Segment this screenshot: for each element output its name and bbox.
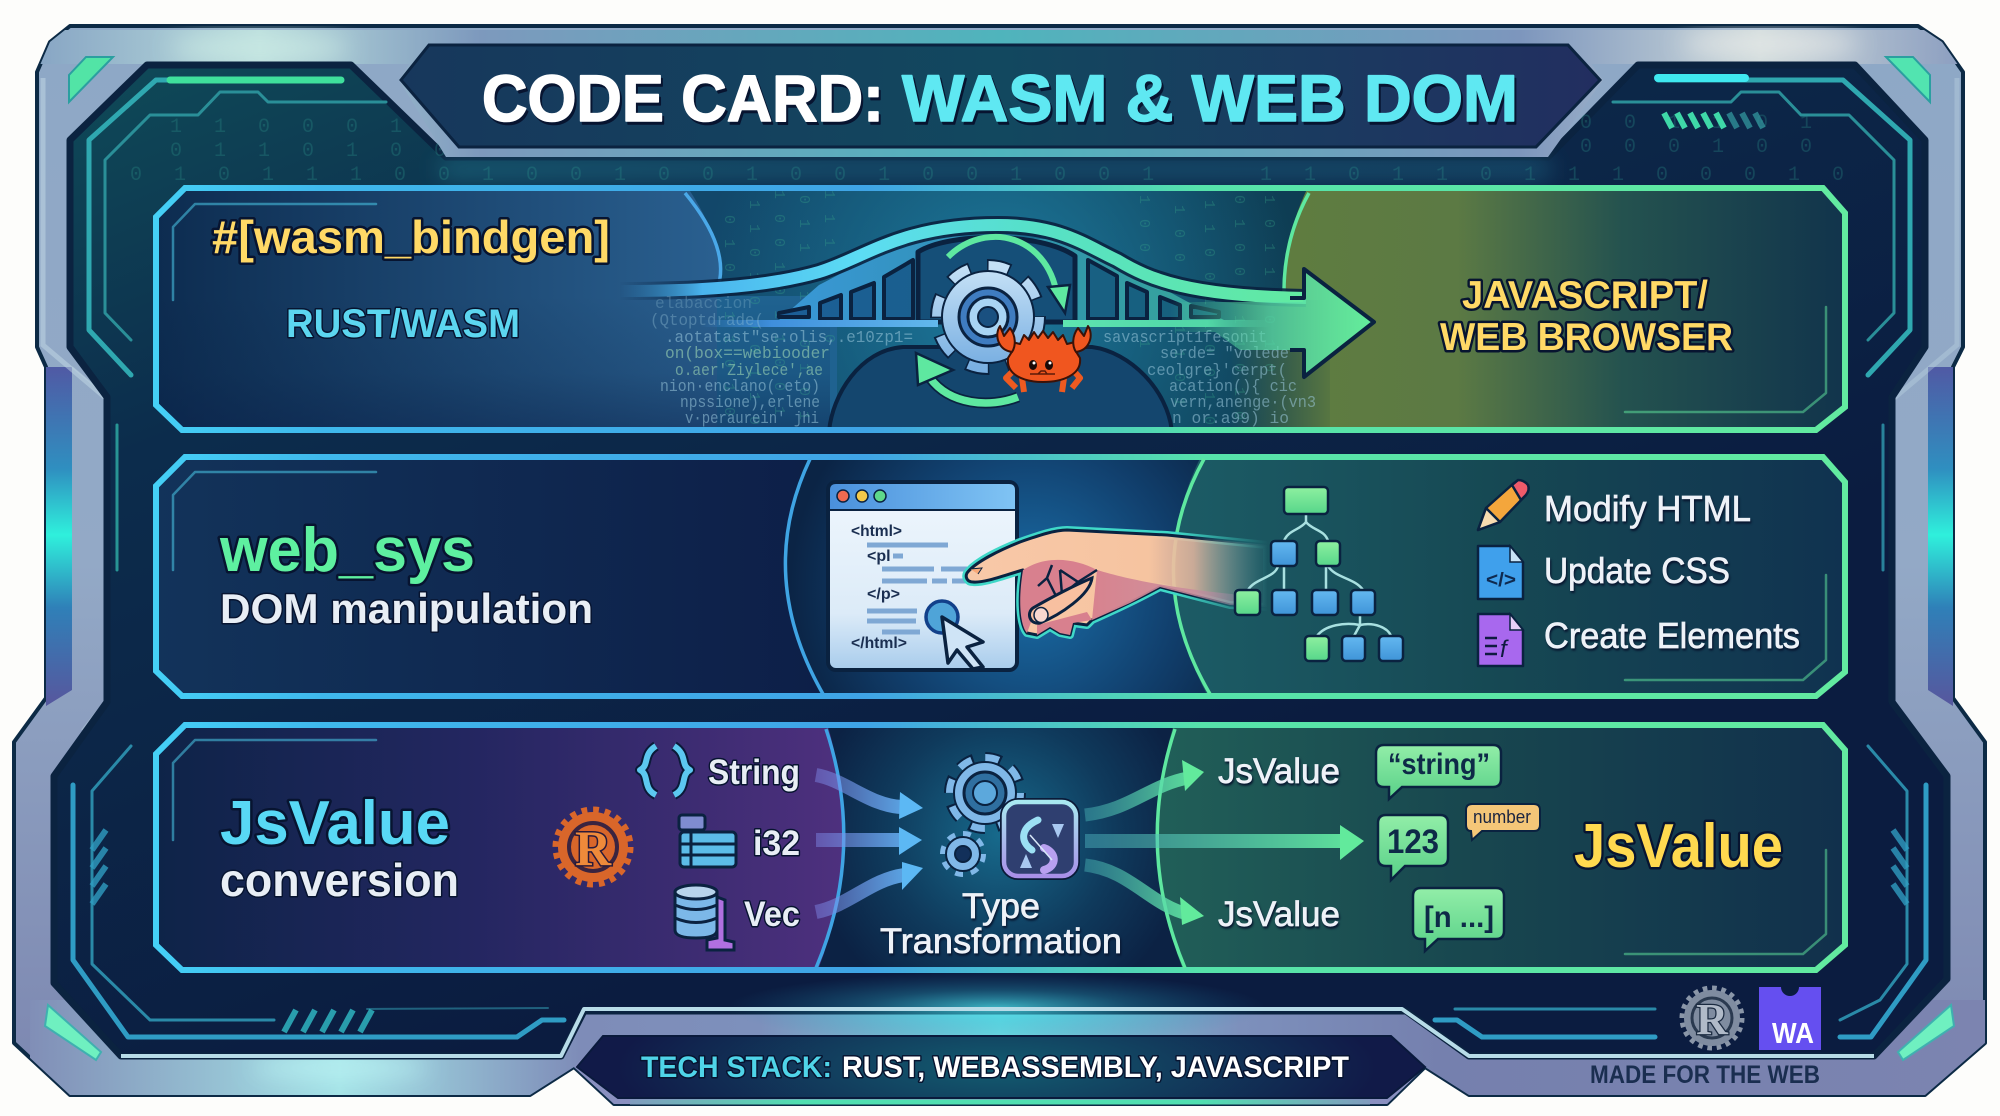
icon: browser window: <pl [867,548,891,565]
icon: DOM tree [1235,487,1403,661]
output: number [1378,804,1540,880]
label: javascript web browser: WEB BROWSER [1440,316,1733,359]
icon: WebAssembly logo: WA [1772,1018,1814,1050]
arrows: transform to JsValue [1085,760,1364,925]
output: number: 123 [1387,823,1439,861]
output: number: number [1473,807,1531,827]
code lines: serde= "volede [1160,345,1289,364]
panel: wasm_bindgen bridge [150,185,1850,467]
code lines: savascript1fesonit [1103,329,1267,348]
subheading: DOM manipulation: DOM manipulation [220,585,593,632]
title text: CODE CARD: [482,61,884,135]
icon: css file [1478,546,1523,599]
icon: elements file: f [1500,636,1509,663]
footer: tech stack: RUST, WEBASSEMBLY, JAVASCRIPT [842,1051,1349,1084]
frame circuit lines [73,78,1926,1037]
title plate: WASM & WEB DOM [902,61,1518,135]
panel border [156,457,1845,696]
icon: css file: </> [1486,570,1516,591]
heading: web_sys: web_sys [219,516,475,585]
code rain: 1 0 1 1 0 0 1 0 [1260,195,1277,375]
icon: browser window: <html> [851,523,902,540]
panel: web_sys DOM manipulation [150,450,1850,700]
code rain: 1 0 0 1 1 0 1 [1135,195,1152,351]
code rain: 1 0 0 1 0 1 1 0 0 1 0 [770,190,787,442]
text: update css: Update CSS [1544,550,1730,591]
output: string: “string” [1388,748,1490,781]
panel border [156,188,1845,430]
icon: browser window: </p> [867,586,900,603]
label: rust/wasm: RUST/WASM [286,302,520,346]
heading: JsValue: JsValue [220,789,450,858]
icon: rust logo grey [1683,989,1741,1047]
code lines: .aotatast"se:olis,.e10zp1= [665,329,913,348]
binary background pattern [130,112,1854,187]
icon: elements file [1478,614,1523,666]
text: made for the web: MADE FOR THE WEB [1590,1061,1820,1089]
output: array: JsValue [1218,895,1340,934]
code lines: npssione),erlene [680,394,820,413]
code lines: elabaccion [655,295,752,314]
code lines: acation(){ cic [1169,378,1297,397]
label: String: String [708,753,800,792]
binary background pattern: 0 0 1 1 0 1 [1580,112,1822,135]
code rain: 1 1 0 0 1 1 0 0 1 0 [1200,200,1217,428]
label: type transformation [880,887,1122,961]
icon: rust crab [997,326,1091,392]
bridge [620,225,1306,327]
code lines: (Qtoptdrade( [650,312,764,331]
icon: rust logo: R [575,820,612,876]
label: Vec: Vec [744,895,800,934]
panel border [156,725,1845,970]
list: DOM actions [1478,480,1800,666]
code rain: 1 1 1 0 0 1 0 [820,190,837,346]
icon: gear [938,267,1038,367]
arrows: rust types to transform [816,775,923,912]
binary background pattern: 1 1 0 1 1 0 1 1 1 0 0 0 1 0 [1260,164,1854,187]
label: type transformation: Transformation [880,922,1122,961]
icon: pencil [1478,480,1529,530]
output: array: [n ...] [1424,901,1494,934]
binary background pattern: 0 0 0 1 0 0 [1580,136,1822,159]
icon: browser window [828,482,1017,670]
code lines: ceolgre}'cerpt( [1147,362,1287,381]
code rain [725,191,1275,424]
rust types [640,746,800,950]
code lines: on(box==webiooder [665,345,830,364]
subheading: conversion: conversion [220,854,459,906]
code lines: n or:a99) io [1172,410,1289,429]
icon: transformation gears [944,759,1076,876]
icon: table [679,815,736,867]
code rain: 0 1 0 0 1 1 0 1 0 0 1 [720,215,737,467]
label: type transformation: Type [962,887,1040,926]
code lines [650,295,1316,429]
code rain: 1 1 0 1 0 0 0 1 1 0 [745,200,762,428]
label: javascript web browser [1440,274,1733,359]
heading: wasm_bindgen: #[wasm_bindgen] [212,211,610,263]
code rain: 1 0 0 1 0 1 1 0 1 [1170,205,1187,409]
footer: tech stack: TECH STACK: [641,1051,832,1084]
icon: database [675,885,734,950]
label: javascript web browser: JAVASCRIPT/ [1462,274,1708,317]
icon: WebAssembly logo [1759,987,1821,1050]
text: create elements: Create Elements [1544,615,1800,656]
text: modify html: Modify HTML [1544,488,1751,529]
icon: browser window: </html> [851,635,907,652]
binary background pattern: 0 1 0 1 1 1 0 0 1 0 0 1 0 0 1 0 0 1 0 0 1 0 0 1 [130,164,1164,187]
icon: circular arrows [916,237,1070,403]
output: string: JsValue [1218,752,1340,791]
code lines: vern,anenge·(vn3 [1170,394,1316,413]
badges: made for the web [1590,987,1821,1089]
icon: rust logo [557,811,629,883]
panel: JsValue conversion [150,720,1850,975]
icon: braces [640,746,690,795]
output: string [1218,745,1501,799]
heading: JsValue result: JsValue [1574,812,1783,881]
output: array [1218,888,1504,951]
icon: hand [966,530,1267,635]
mound [829,347,1172,432]
footer: tech stack [574,1036,1425,1104]
arrow to browser [1170,268,1374,377]
label: i32: i32 [753,824,800,863]
code lines: v·peraurein' jhi [685,410,819,429]
code rain: 0 1 1 0 1 0 0 1 0 1 [795,195,812,423]
code rain: 0 1 0 0 0 1 1 0 1 0 [1230,195,1247,423]
title plate [399,38,1603,157]
icon: rust logo grey: R [1696,995,1729,1044]
code lines: nion·enclano(·eto) [660,378,820,397]
code lines: o.aer'Ziylece',ae [675,362,823,381]
binary background pattern: 0 1 1 0 1 0 0 0 1 [170,140,544,163]
binary background pattern: 1 1 0 0 0 1 1 0 1 [170,116,544,139]
